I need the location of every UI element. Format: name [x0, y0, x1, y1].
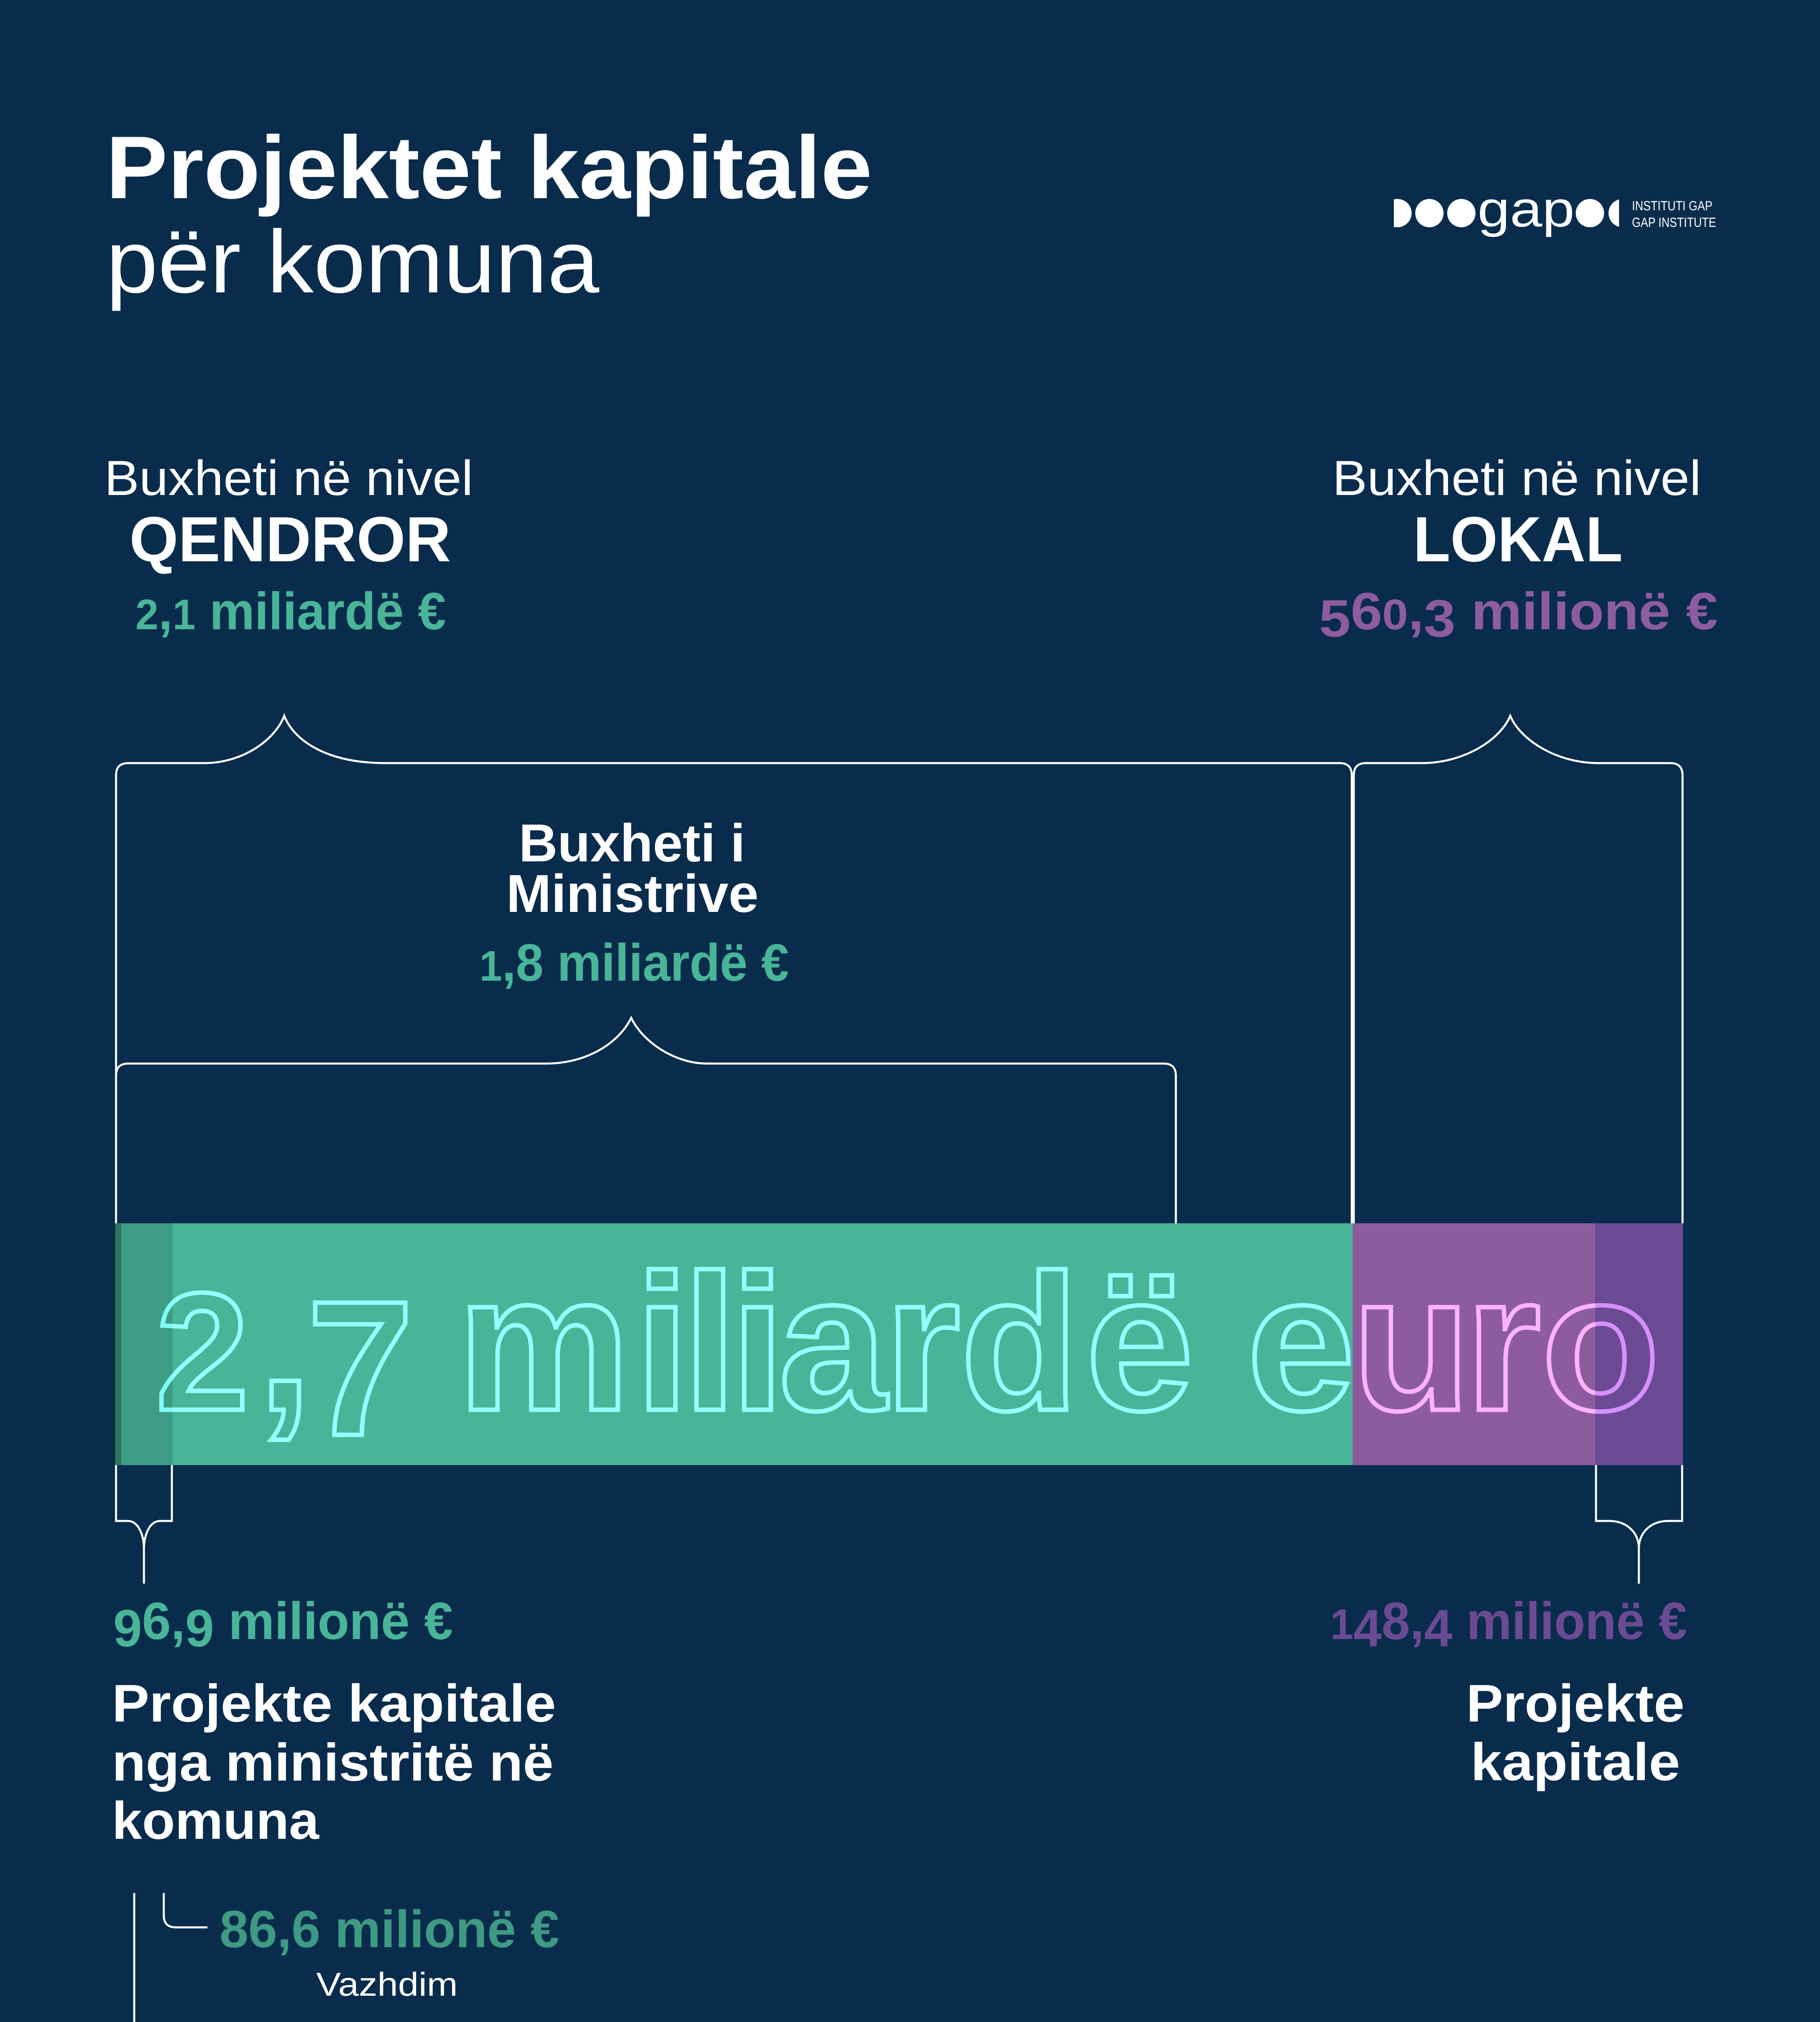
text block: local capital projects: milionë € — [1452, 1591, 1687, 1650]
label: ministries budget: Ministrive — [506, 864, 759, 923]
brace: ministries — [116, 1018, 1176, 1223]
text block: capital projects from ministries: 9 — [113, 1599, 142, 1658]
label: local level budget: 5 — [1319, 589, 1351, 648]
text block: capital projects from ministries: 6 — [142, 1591, 171, 1650]
label: ministries budget: 1,8 miliardë € — [480, 933, 789, 992]
outlined total figure: r — [1465, 1234, 1541, 1451]
outlined total figure: 7 — [307, 1261, 414, 1476]
text block: local capital projects: 8 — [1382, 1591, 1410, 1650]
text block: local capital projects: , — [1410, 1591, 1425, 1650]
text block: local capital projects: 4 — [1424, 1599, 1452, 1658]
breakdown: continuing projects: 86,6 milionë € — [220, 1899, 559, 1959]
outlined total figure: ë — [1086, 1234, 1194, 1451]
label: central level budget — [104, 451, 473, 641]
label: ministries budget — [480, 813, 789, 992]
label: local level budget: 0, — [1382, 582, 1423, 641]
label: central level budget: QENDROR — [129, 504, 451, 575]
outlined total figure: i — [635, 1234, 689, 1451]
connector: new projects — [134, 1893, 207, 2022]
brace: local level — [1354, 716, 1683, 1223]
outlined total figure: e — [1247, 1234, 1355, 1451]
text block: capital projects from ministries: 9 — [185, 1599, 214, 1658]
brace: ministry projects in municipalities — [116, 1465, 172, 1584]
outlined total figure: l — [683, 1234, 737, 1451]
title: Projektet kapitale — [106, 118, 872, 217]
text block: capital projects from ministries: nga ministritë në — [112, 1732, 554, 1792]
label: local level budget: Buxheti në nivel — [1332, 451, 1701, 506]
label: ministries budget: Buxheti i — [519, 813, 745, 873]
stacked bar — [115, 1223, 1683, 1465]
outlined total figure: 2 — [156, 1258, 249, 1445]
brace: local capital projects — [1596, 1465, 1682, 1584]
label: local level budget: 6 — [1351, 582, 1382, 641]
breakdown: continuing projects — [220, 1899, 559, 2003]
label: central level budget: Buxheti në nivel — [104, 451, 473, 506]
outlined total figure: a — [779, 1234, 888, 1451]
outlined total figure: r — [885, 1234, 960, 1451]
logo: GAP Institute: INSTITUTI GAP — [1632, 198, 1712, 213]
text block: capital projects from ministries: Projekte kapitale — [112, 1673, 556, 1733]
text block: capital projects from ministries: , — [171, 1591, 186, 1650]
text block: capital projects from ministries: milionë € — [214, 1591, 453, 1650]
text block: local capital projects: kapitale — [1471, 1732, 1680, 1791]
outlined total figure: m — [457, 1234, 630, 1451]
title — [106, 118, 872, 311]
label: central level budget: 2,1 miliardë € — [135, 582, 446, 641]
breakdown: continuing projects: Vazhdim — [316, 1966, 458, 2003]
text block: local capital projects — [1330, 1591, 1687, 1791]
outlined total figure: o — [1541, 1234, 1660, 1451]
logo: GAP Institute: GAP INSTITUTE — [1632, 215, 1716, 230]
text block: capital projects from ministries — [112, 1591, 556, 1850]
outlined total figure: u — [1352, 1234, 1471, 1451]
brace: central level — [116, 716, 1352, 1223]
outlined total figure: i — [731, 1234, 784, 1451]
logo: GAP Institute — [1394, 199, 1716, 237]
text block: local capital projects: 4 — [1353, 1599, 1382, 1658]
label: local level budget — [1319, 451, 1718, 648]
text block: local capital projects: Projekte — [1466, 1673, 1685, 1733]
outlined total figure: , — [258, 1234, 312, 1451]
label: local level budget: LOKAL — [1413, 504, 1623, 575]
outlined total figure: d — [960, 1234, 1079, 1451]
label: local level budget: 3 — [1424, 589, 1455, 648]
label: local level budget: milionë € — [1455, 582, 1718, 641]
connector: continuing projects — [164, 1893, 207, 1927]
logo: GAP Institute: gap — [1478, 181, 1575, 237]
text block: local capital projects: 1 — [1330, 1601, 1353, 1648]
title: për komuna — [106, 212, 600, 311]
text block: capital projects from ministries: komuna — [112, 1791, 319, 1850]
